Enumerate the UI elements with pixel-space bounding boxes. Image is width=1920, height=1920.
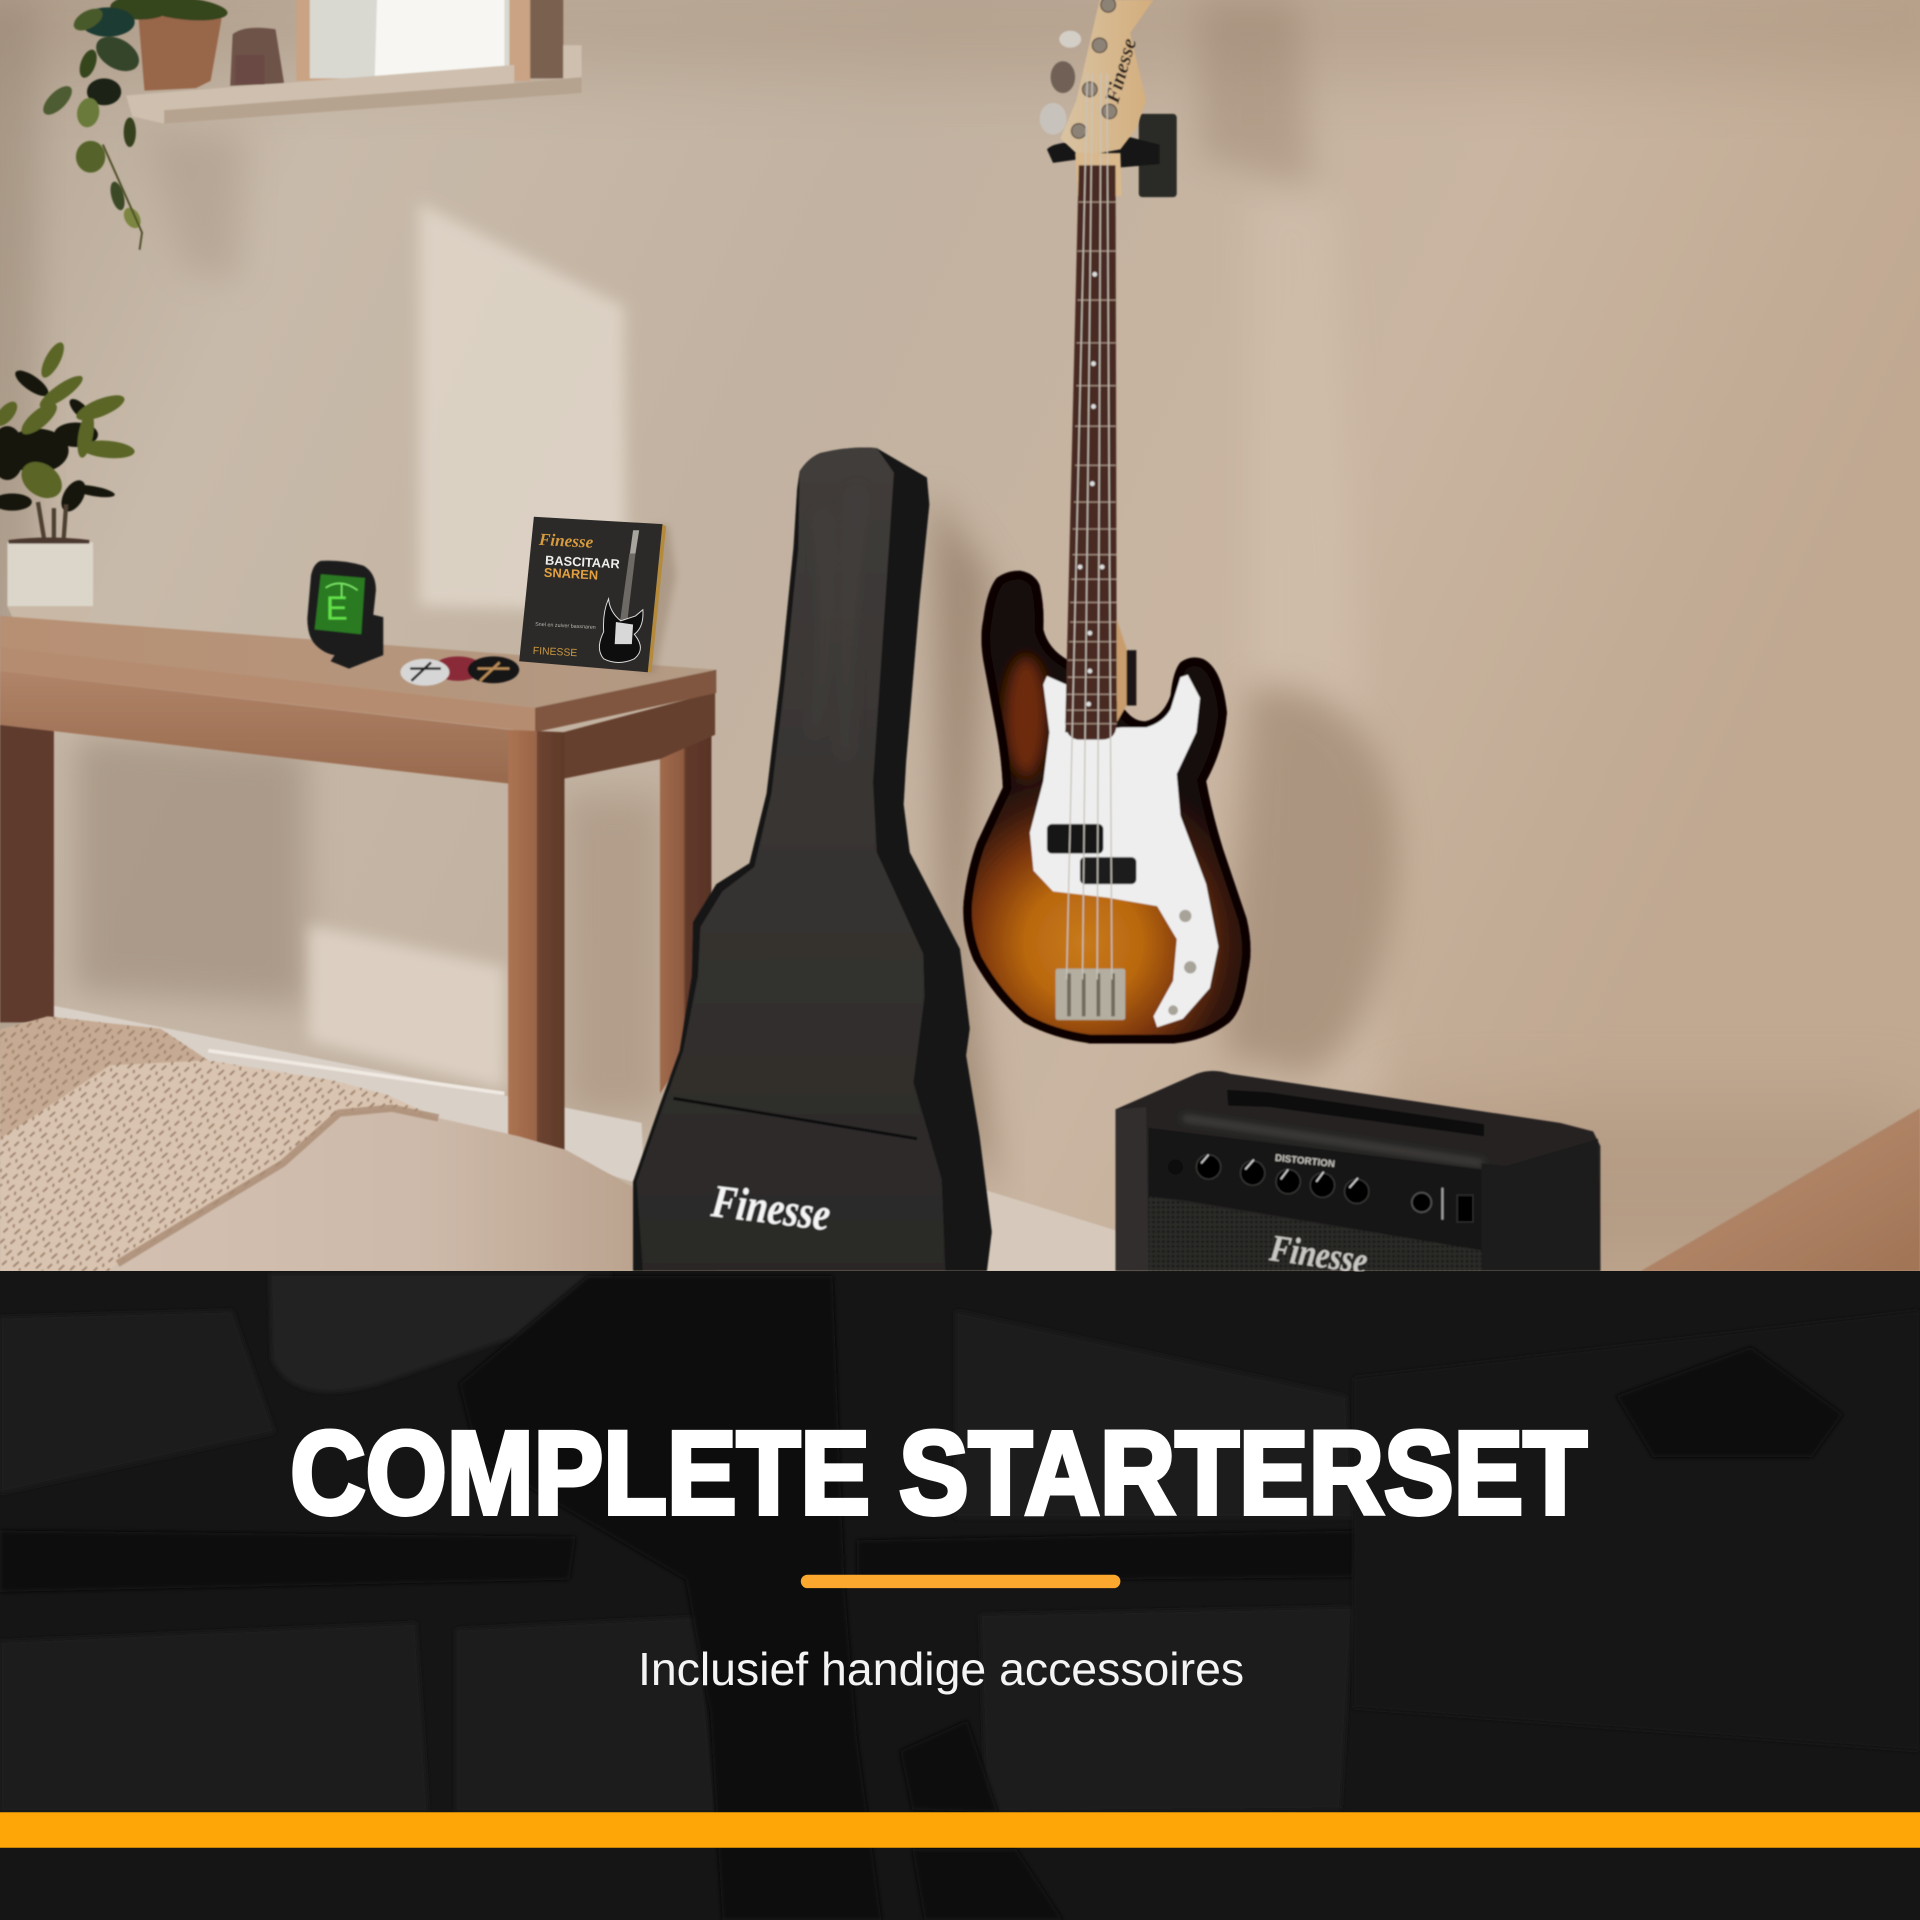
shelf board: [126, 45, 582, 124]
control panel: [1149, 1128, 1482, 1250]
subtitle: Inclusief handige accessoires: [638, 1643, 1244, 1695]
speaker grille: [1149, 1196, 1482, 1271]
body: [963, 571, 1251, 1043]
baseboard: [51, 1005, 1120, 1271]
wall: [0, 0, 1920, 1271]
potted plant on table: [0, 339, 135, 626]
gig bag: [633, 448, 992, 1271]
booklet guitar: [599, 530, 643, 662]
left strip: [1116, 1107, 1149, 1271]
bass guitar: [963, 0, 1251, 1043]
faint house roof: [1353, 1310, 1920, 1751]
booklet brand: FINESSE: [532, 646, 578, 659]
headstock logo: Finesse: [1099, 36, 1141, 106]
bed with knitted blanket: [0, 1016, 718, 1271]
dark back frame: [530, 0, 564, 80]
wall hanger: [1047, 114, 1177, 197]
string pack booklet: [519, 517, 676, 673]
floor wood, lower right: [1641, 1108, 1920, 1271]
wooden console table: [0, 616, 716, 1151]
tuner: [307, 561, 383, 669]
amp handle: [1227, 1090, 1484, 1136]
amp logo: Finesse: [1267, 1227, 1370, 1283]
dark text panel: [0, 1271, 1920, 1920]
strings: [1067, 73, 1112, 980]
amp top highlight: [1183, 1118, 1483, 1163]
booklet logo: Finesse: [538, 530, 594, 552]
guitar picks: [400, 656, 519, 686]
booklet blurb: Snel en zuiver bassnaren: [535, 622, 596, 631]
terracotta pot: [138, 16, 222, 91]
front leg: [508, 730, 564, 1151]
amp section label: DISTORTION: [1274, 1153, 1335, 1170]
orange band: [0, 1812, 1920, 1848]
booklet title: BASCITAAR: [545, 553, 621, 571]
neck and fretboard: [1065, 73, 1136, 980]
vase: [230, 28, 284, 86]
title: COMPLETE STARTERSET: [290, 1407, 1587, 1538]
front edge: [0, 647, 535, 732]
zipper pocket: [673, 1098, 917, 1139]
rear right leg: [660, 732, 711, 1093]
dark figure silhouette: [459, 1276, 882, 1920]
orange divider: [801, 1575, 1120, 1588]
wall shelf with decor: [39, 0, 582, 250]
headstock: [1040, 0, 1153, 157]
gig bag logo: Finesse: [708, 1176, 833, 1241]
faint guitar silhouette: [269, 1273, 612, 1392]
string pack booklet: SNAREN: [544, 565, 598, 583]
pickguard: [1030, 675, 1218, 1027]
control knobs: [1168, 910, 1196, 1015]
faint stone wall: [0, 1310, 1353, 1812]
front apron: [0, 671, 509, 784]
panel background photo: [0, 1271, 1920, 1920]
pickups: [1047, 824, 1136, 884]
mirror: [296, 0, 530, 81]
bridge: [1056, 969, 1125, 1020]
top surface: [0, 616, 716, 708]
hanging plant: [39, 0, 229, 250]
rear left leg: [0, 722, 54, 1022]
amp side: [1482, 1139, 1600, 1271]
side apron: [563, 692, 715, 779]
blanket: [0, 1016, 438, 1271]
photo: bedroom scene with bass guitar set: [0, 0, 1920, 1283]
amplifier: [1116, 1071, 1600, 1283]
tuner note letter: E: [326, 591, 348, 628]
